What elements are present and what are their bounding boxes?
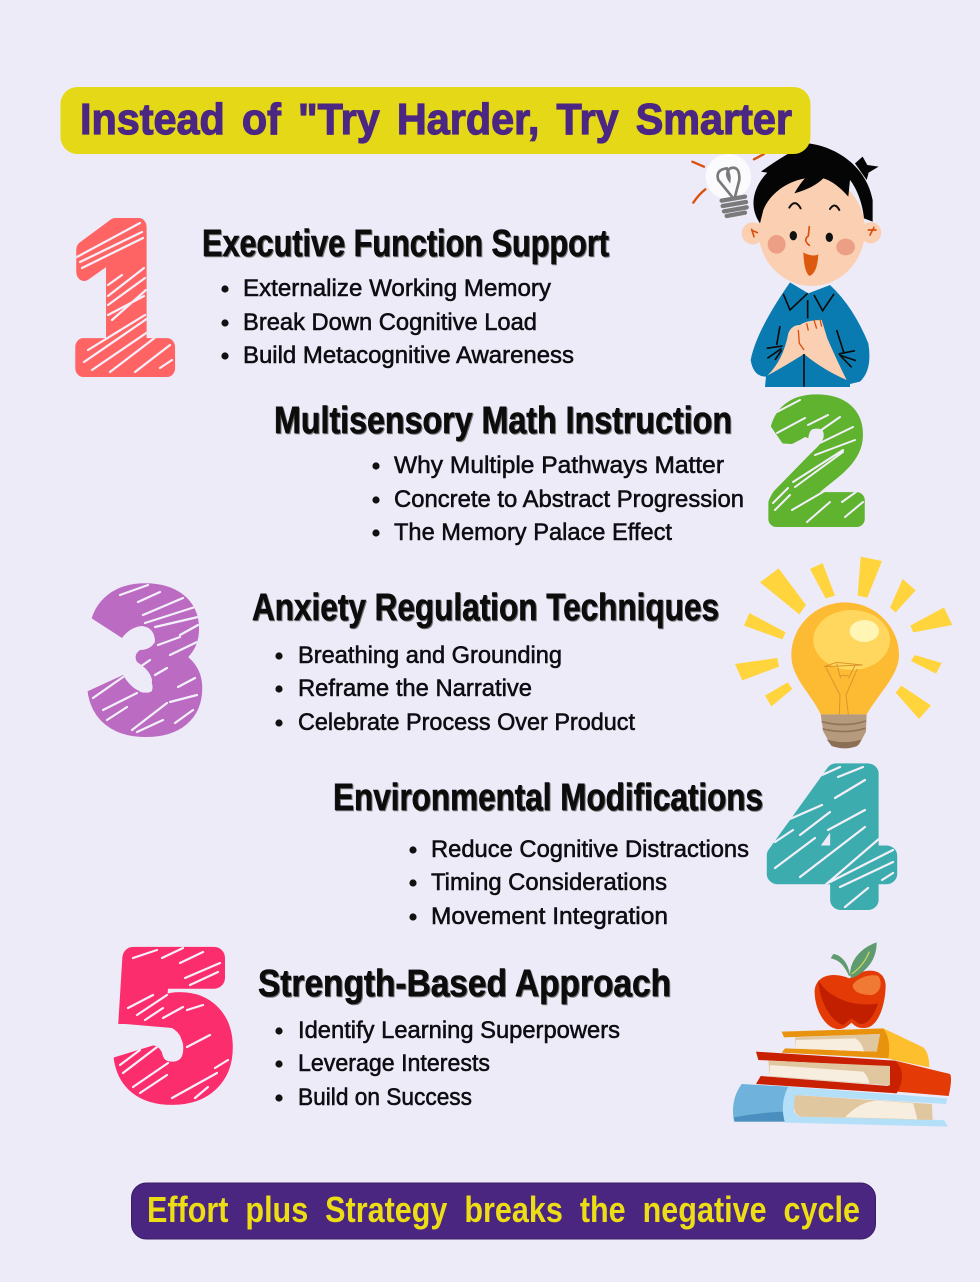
bullet list 2: The Memory Palace Effect <box>394 519 672 546</box>
bullet list 2: Concrete to Abstract Progression <box>394 486 744 513</box>
footer banner: Effort plus Strategy breaks the negative cycle <box>147 1189 860 1230</box>
boy head <box>758 174 865 286</box>
bullet list 3: Breathing and Grounding <box>298 642 562 669</box>
bullet list 3 <box>275 642 635 736</box>
title banner <box>60 87 810 154</box>
number 4 <box>766 763 898 910</box>
heading 2: Multisensory Math Instruction <box>274 400 732 442</box>
section 2: multisensory math <box>276 394 865 546</box>
bullet list 1: Break Down Cognitive Load <box>243 309 537 336</box>
bullet list 4: Reduce Cognitive Distractions <box>431 836 749 863</box>
apple <box>815 942 886 1029</box>
heading 4: Environmental Modifications <box>333 777 763 819</box>
number 2: 2 <box>771 369 863 555</box>
boy body <box>751 282 869 387</box>
number 2 <box>768 394 865 527</box>
bulb reflection <box>850 620 879 642</box>
bullet list 1: Externalize Working Memory <box>243 275 551 302</box>
bullet list 1: Build Metacognitive Awareness <box>243 342 574 369</box>
footer banner <box>132 1183 876 1239</box>
bullet list 5: Leverage Interests <box>298 1050 490 1077</box>
bullet list 2: Why Multiple Pathways Matter <box>394 452 724 479</box>
boy face <box>752 203 876 276</box>
bulb glass <box>791 602 899 714</box>
bulb rays <box>735 557 952 719</box>
icon: idea bulb <box>692 154 764 216</box>
boy ears <box>742 222 881 244</box>
illustration: books and apple <box>733 942 951 1127</box>
section 1: executive function <box>75 218 610 377</box>
number 1: 1 <box>72 182 172 412</box>
bullet list 4: Timing Considerations <box>431 869 667 896</box>
number 5: 5 <box>119 916 227 1134</box>
illustration: glowing light bulb <box>735 557 952 748</box>
bullet list 3: Reframe the Narrative <box>298 675 532 702</box>
bulb base <box>821 714 867 748</box>
bulb highlight <box>813 610 890 670</box>
bottom book <box>733 1084 948 1127</box>
bullet list 4: Movement Integration <box>431 903 668 930</box>
bullet list 1 <box>221 275 574 369</box>
boy arms and hands <box>767 320 847 380</box>
number 4: 4 <box>775 734 887 939</box>
heading 3: Anxiety Regulation Techniques <box>252 587 719 629</box>
top book <box>782 1028 929 1067</box>
bullet list 5 <box>275 1017 620 1111</box>
bullet list 4 <box>409 836 749 930</box>
heading 5: Strength-Based Approach <box>258 963 671 1005</box>
boy hair <box>753 143 879 223</box>
shirt lines <box>767 293 856 387</box>
number 3: 3 <box>95 557 197 762</box>
section 5: strength-based approach <box>114 946 670 1106</box>
bulb filament <box>824 662 863 714</box>
number 1 <box>75 218 176 377</box>
bullet list 3: Celebrate Process Over Product <box>298 709 635 736</box>
heading 1: Executive Function Support <box>202 223 609 265</box>
section 4: environmental modifications <box>334 763 898 930</box>
illustration: boy with light bulb <box>692 143 881 387</box>
number 3 <box>88 583 202 737</box>
middle book <box>756 1052 951 1096</box>
title banner: Instead of "Try Harder, Try Smarter <box>80 95 792 144</box>
section 3: anxiety regulation <box>88 583 719 737</box>
number 5 <box>114 946 233 1105</box>
bullet list 5: Build on Success <box>298 1084 472 1111</box>
bullet list 2 <box>372 452 744 546</box>
bullet list 5: Identify Learning Superpowers <box>298 1017 620 1044</box>
